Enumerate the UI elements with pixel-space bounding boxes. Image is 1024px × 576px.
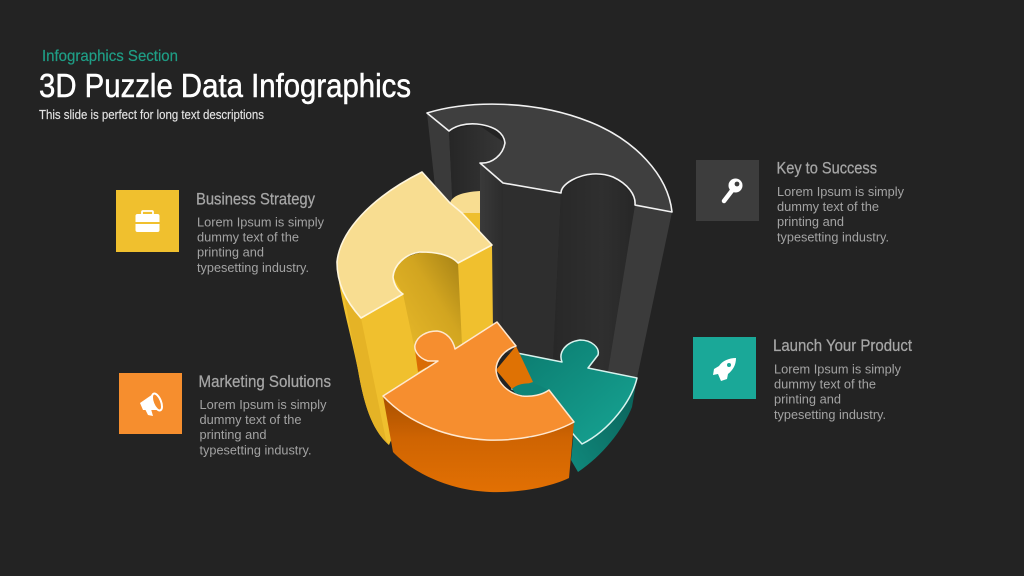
- callout: Business Strategy: [116, 190, 325, 275]
- callout: Launch Your Product: [693, 337, 912, 422]
- puzzle piece: teal: [512, 340, 637, 472]
- subtitle: This slide is perfect for long text descriptions: [39, 107, 264, 122]
- description: Lorem Ipsum is simply: [777, 185, 905, 199]
- description: typesetting industry.: [777, 230, 889, 244]
- description: [774, 362, 902, 422]
- title: 3D Puzzle Data Infographics: [39, 68, 411, 105]
- description: typesetting industry.: [197, 261, 309, 275]
- puzzle piece: gray: [427, 104, 672, 378]
- description: printing and: [200, 428, 267, 442]
- description: dummy text of the: [777, 200, 879, 214]
- description: [200, 398, 327, 458]
- icon tile: briefcase: [116, 190, 179, 252]
- description: printing and: [197, 246, 264, 260]
- heading: Business Strategy: [196, 190, 316, 208]
- description: dummy text of the: [197, 230, 299, 244]
- description: Lorem Ipsum is simply: [774, 362, 902, 376]
- heading: Marketing Solutions: [198, 373, 331, 391]
- description: typesetting industry.: [200, 444, 312, 458]
- header: [39, 48, 411, 122]
- icon tile: rocket: [693, 337, 756, 399]
- description: Lorem Ipsum is simply: [200, 398, 327, 412]
- puzzle piece: orange: [383, 322, 574, 492]
- puzzle piece: yellow: [337, 172, 493, 445]
- callout: Key to Success: [696, 160, 905, 244]
- heading: Launch Your Product: [773, 337, 912, 355]
- description: dummy text of the: [200, 413, 302, 427]
- description: printing and: [777, 215, 844, 229]
- section label: Infographics Section: [42, 48, 178, 65]
- heading: Key to Success: [776, 160, 877, 178]
- description: [777, 185, 905, 244]
- description: printing and: [774, 392, 841, 406]
- description: dummy text of the: [774, 378, 876, 392]
- icon tile: megaphone: [119, 373, 182, 434]
- description: [197, 216, 325, 275]
- callout: Marketing Solutions: [119, 373, 331, 458]
- description: Lorem Ipsum is simply: [197, 216, 325, 230]
- icon tile: key: [696, 160, 759, 221]
- 3D puzzle graphic: [337, 104, 672, 492]
- description: typesetting industry.: [774, 408, 886, 422]
